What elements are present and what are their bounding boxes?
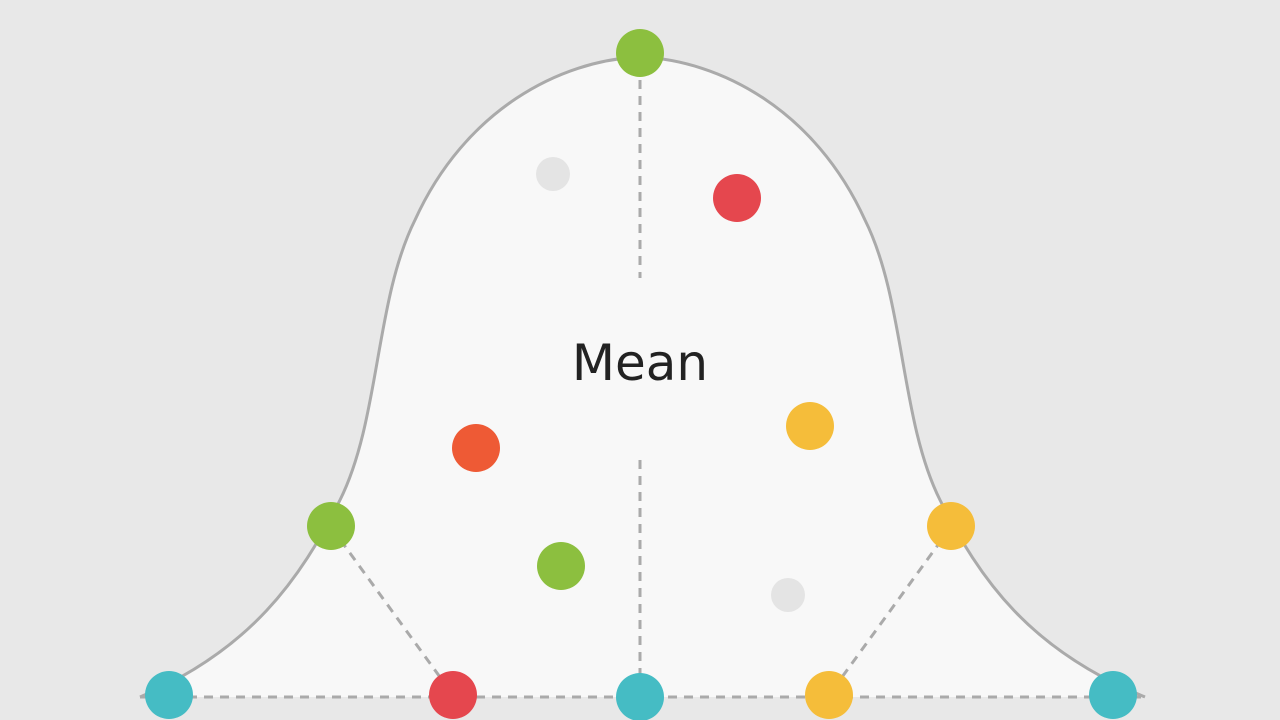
label: Mean: Mean: [572, 334, 708, 392]
data points: [145, 29, 1137, 720]
bell curve shape: [140, 57, 1145, 697]
